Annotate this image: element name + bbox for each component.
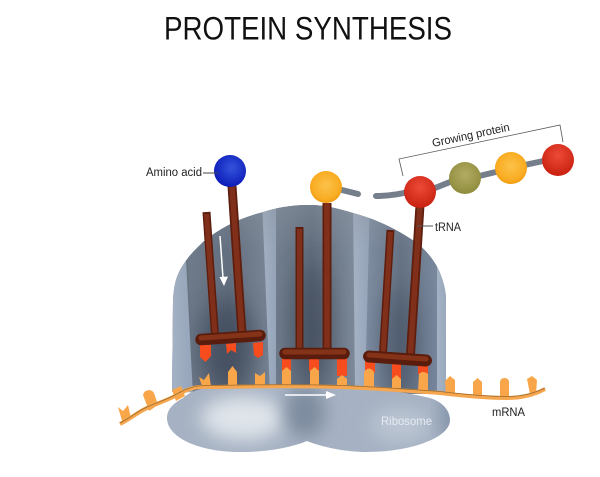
- short stem: [383, 230, 390, 353]
- crossbar: [369, 356, 426, 360]
- light strip: left: [172, 260, 193, 392]
- amino acid: red: [542, 144, 574, 176]
- tRNA right: [369, 205, 426, 360]
- panel: P site: [276, 200, 355, 395]
- title: PROTEIN SYNTHESIS: [164, 10, 452, 46]
- light strip: right: [437, 267, 446, 392]
- long stem: [322, 203, 332, 350]
- label: Amino acid: Amino acid: [146, 167, 202, 179]
- arrow: translocation down: [220, 236, 228, 286]
- light strip: centre right: [353, 213, 370, 386]
- bracket: growing protein: [399, 125, 563, 176]
- tRNA left, entering: [201, 186, 260, 340]
- protein synthesis infographic: [118, 16, 574, 452]
- shadow: centre: [285, 386, 325, 438]
- mRNA strand with codons: [118, 366, 545, 424]
- growing protein chain links: [342, 160, 548, 196]
- short stem: [206, 212, 215, 335]
- highlight: left lobe: [201, 396, 285, 440]
- highlight: right lobe: [372, 409, 428, 441]
- label: tRNA: [417, 222, 461, 234]
- mRNA bases: [118, 366, 537, 424]
- label: Growing protein: Growing protein: [431, 122, 511, 150]
- label: tRNA: tRNA: [435, 222, 461, 234]
- panel: E site: [366, 218, 437, 394]
- crossbar: [201, 336, 260, 340]
- light strip: centre left: [262, 208, 276, 384]
- mRNA backbone: [120, 386, 545, 424]
- amino acid: yellow: [495, 152, 527, 184]
- tRNA middle: [285, 203, 344, 354]
- dome top shading: [212, 205, 407, 242]
- label: mRNA: mRNA: [492, 407, 525, 419]
- amino acid: blue: [214, 155, 246, 187]
- panel: A site: [188, 212, 270, 384]
- anticodons: [200, 342, 428, 379]
- ribosome small subunit: [167, 388, 450, 452]
- long stem: [232, 186, 242, 334]
- crossbar: [285, 348, 344, 359]
- amino acid: red on tRNA: [404, 176, 436, 208]
- long stem: [410, 205, 420, 354]
- amino acid: olive: [449, 162, 481, 194]
- label: Ribosome: Ribosome: [381, 414, 432, 428]
- ribosome large subunit: [170, 200, 450, 395]
- edge shade: right: [434, 400, 450, 436]
- amino acid: yellow on tRNA: [310, 171, 342, 203]
- panel shadows: [202, 260, 416, 395]
- short stem: [296, 227, 304, 350]
- arrow: ribosome movement: [285, 391, 336, 399]
